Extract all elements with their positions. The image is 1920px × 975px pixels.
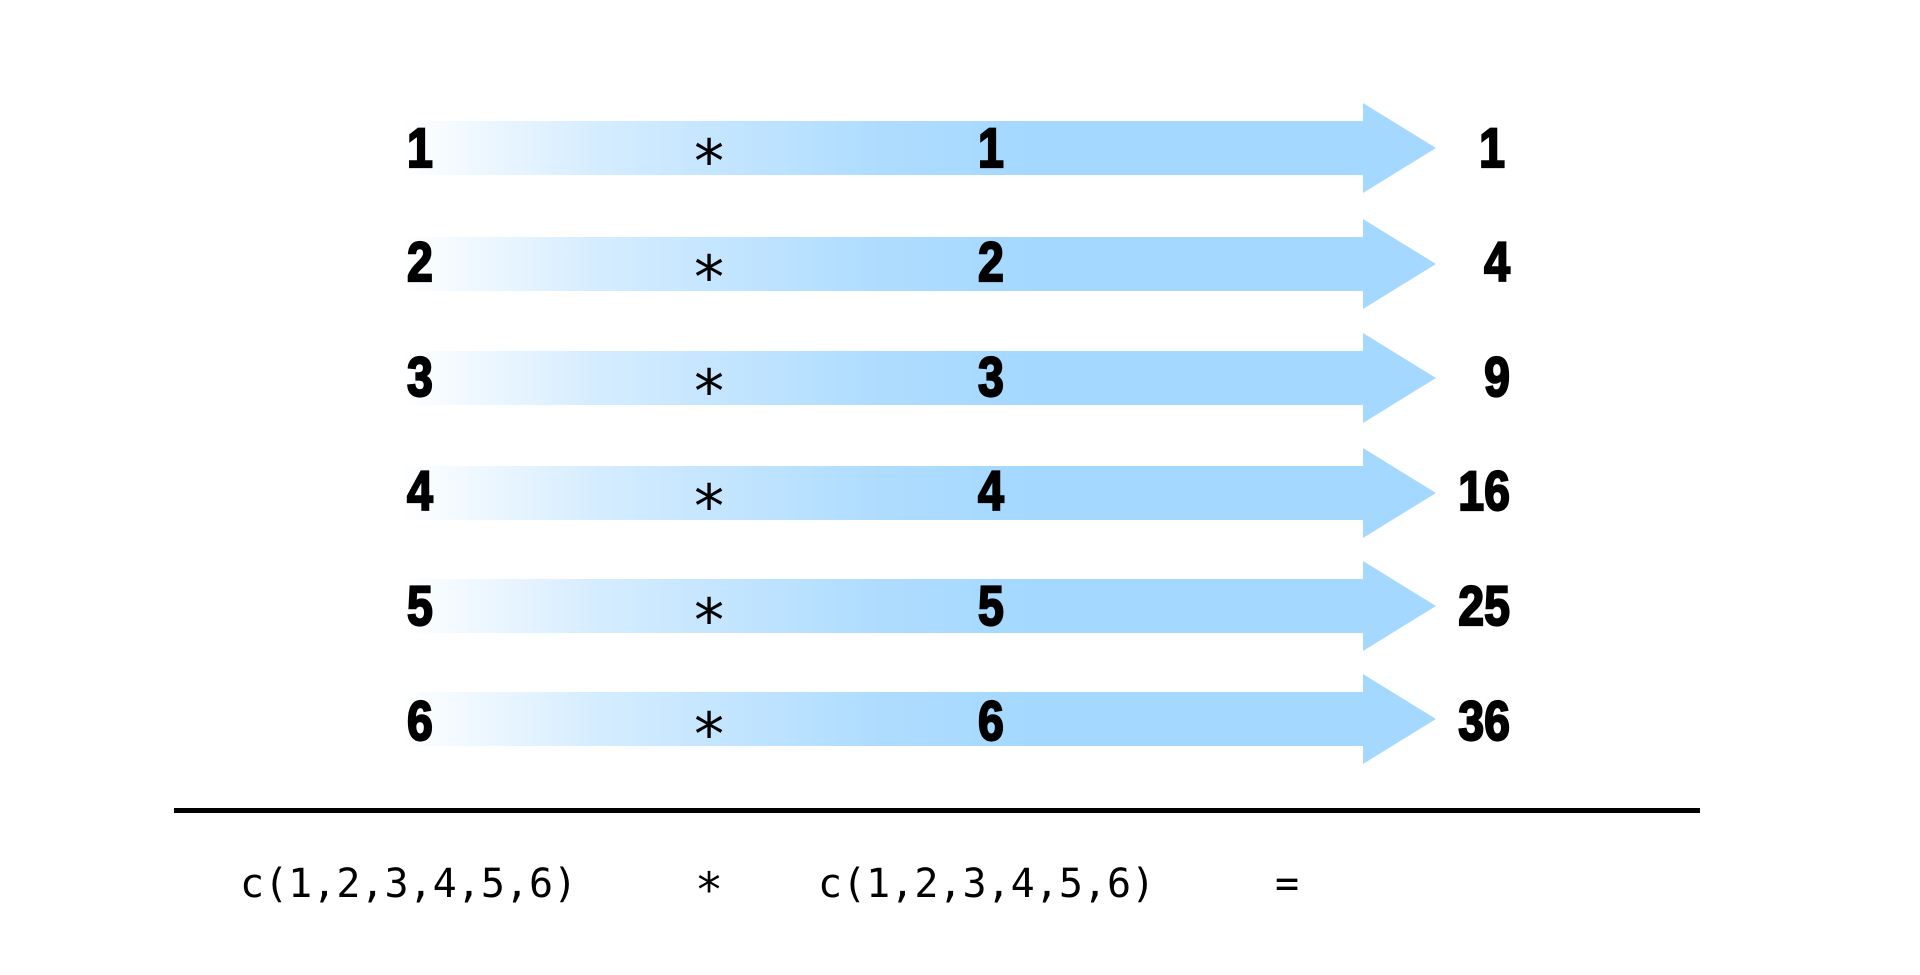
arrow 3 <box>400 333 1436 423</box>
code expression <box>240 861 1299 918</box>
right operand 6: 6 <box>978 689 1004 752</box>
result 9: 9 <box>1484 345 1510 408</box>
result 25: 25 <box>1458 574 1510 637</box>
row 5: 5 * 5 = 25 <box>400 561 1510 656</box>
right operand 5: 5 <box>978 574 1004 637</box>
divider line <box>174 808 1700 813</box>
result 4: 4 <box>1484 230 1510 293</box>
equals sign: = <box>1275 861 1299 907</box>
left operand 4: 4 <box>407 459 433 522</box>
row 2: 2 * 2 = 4 <box>400 219 1510 313</box>
left operand 2: 2 <box>407 230 433 293</box>
row 4: 4 * 4 = 16 <box>400 448 1510 542</box>
asterisk 4: * <box>691 472 727 542</box>
row 3: 3 * 3 = 9 <box>400 333 1510 427</box>
arrow 4 <box>400 448 1436 538</box>
left operand 1: 1 <box>407 116 433 179</box>
result 1: 1 <box>1479 116 1505 179</box>
first vector: c(1,2,3,4,5,6) <box>240 861 577 907</box>
right operand 3: 3 <box>978 345 1004 408</box>
right operand 4: 4 <box>978 459 1004 522</box>
right operand 2: 2 <box>978 230 1004 293</box>
arrow 2 <box>400 219 1436 309</box>
asterisk 6: * <box>691 700 727 770</box>
arrow 5 <box>400 561 1436 651</box>
asterisk 3: * <box>691 357 727 427</box>
result 16: 16 <box>1458 459 1510 522</box>
left operand 5: 5 <box>407 574 433 637</box>
row 1: 1 * 1 = 1 <box>400 103 1505 197</box>
asterisk 5: * <box>691 586 727 656</box>
asterisk 2: * <box>691 243 727 313</box>
second vector: c(1,2,3,4,5,6) <box>818 861 1155 907</box>
row 6: 6 * 6 = 36 <box>400 674 1510 770</box>
multiply sign: * <box>695 863 723 918</box>
right operand 1: 1 <box>978 116 1004 179</box>
result 36: 36 <box>1458 689 1510 752</box>
arrow 1 <box>400 103 1436 193</box>
left operand 3: 3 <box>407 345 433 408</box>
left operand 6: 6 <box>407 689 433 752</box>
asterisk 1: * <box>691 127 727 197</box>
arrow 6 <box>400 674 1436 764</box>
